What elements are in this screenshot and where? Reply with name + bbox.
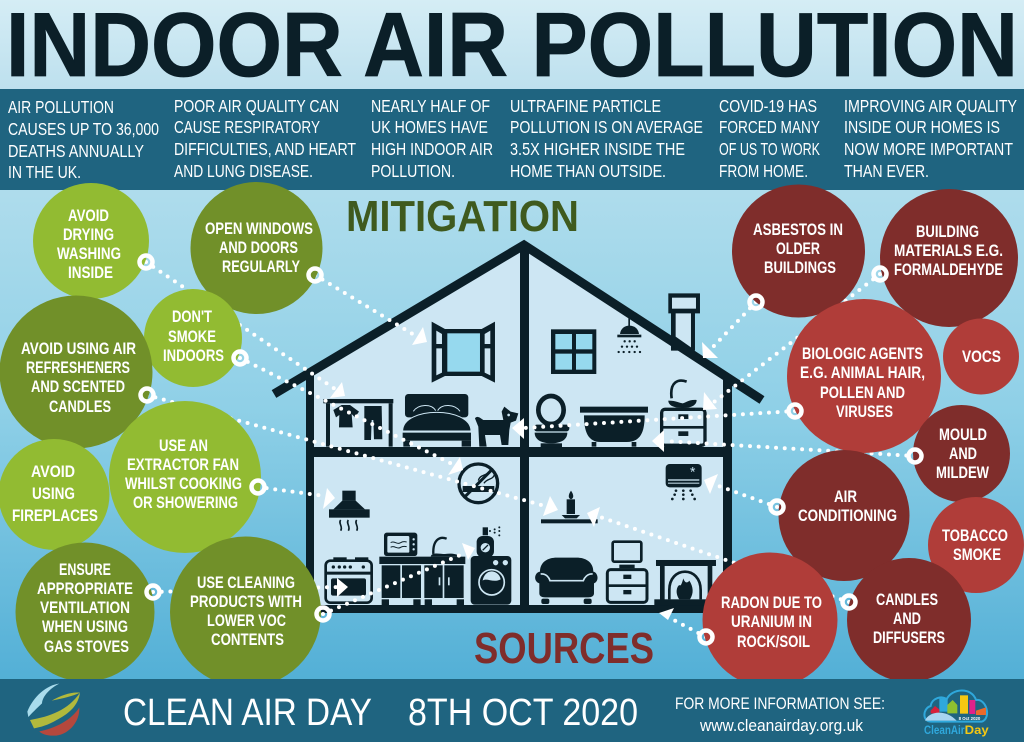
arrow: no smoking	[240, 358, 463, 475]
footer: date: 8TH OCT 2020	[408, 692, 638, 734]
fact: health	[174, 96, 356, 181]
icon: clean air day logo	[924, 691, 989, 737]
footer: event name: CLEAN AIR DAY	[123, 692, 372, 734]
arrow: open windows to window	[315, 275, 427, 345]
fact: importance: THAN EVER.	[844, 161, 929, 181]
heading: sources: SOURCES	[474, 624, 654, 673]
icon: chimney	[668, 293, 700, 351]
circle: extractor fan: WHILST COOKING	[125, 475, 242, 493]
circle: vocs	[943, 318, 1019, 394]
icon: bed	[403, 394, 471, 447]
panel: facts band	[0, 89, 1024, 190]
icon: cooker hood	[329, 491, 370, 531]
roof	[274, 245, 762, 400]
arrow: cleaning products to spray	[323, 543, 475, 614]
circle: mould and mildew: MOULD	[939, 426, 987, 444]
icon: toilet	[534, 396, 569, 447]
circle: air conditioning: AIR	[834, 488, 857, 506]
fact: deaths	[8, 97, 159, 182]
arrow: air refresheners to candle	[147, 395, 558, 516]
circle: biologic agents	[787, 299, 941, 453]
circle: building materials: BUILDING	[916, 223, 979, 241]
circle: air refresheners: REFRESHENERS	[26, 359, 130, 377]
circle: building materials	[874, 189, 1018, 327]
arrow: drying washing to clothes rail	[146, 262, 345, 398]
fact: covid	[719, 96, 820, 181]
circle: open windows: OPEN WINDOWS	[205, 220, 313, 238]
circle: air refresheners	[0, 296, 154, 448]
circle: candles and diffusers	[842, 558, 971, 682]
icon: microwave	[384, 533, 417, 556]
circle: avoid drying washing: AVOID	[68, 207, 109, 225]
circle: air refresheners: CANDLES	[49, 398, 111, 416]
circle: asbestos: BUILDINGS	[764, 259, 836, 277]
icon: shower	[617, 318, 641, 353]
circle: mould and mildew: AND	[949, 445, 977, 463]
circle: air conditioning: CONDITIONING	[798, 507, 897, 525]
circle: don't smoke: SMOKE	[168, 328, 216, 346]
circle: radon: RADON DUE TO	[721, 594, 822, 612]
icon: bowl logo	[27, 684, 80, 736]
circle: radon: URANIUM IN	[731, 613, 812, 631]
circle: cleaning products	[170, 536, 330, 688]
icon: bathroom sink cabinet	[662, 381, 705, 445]
fact: importance	[844, 96, 1017, 181]
fact: homes	[371, 96, 493, 181]
circle: open windows	[190, 182, 322, 314]
fact: ultrafine particles: POLLUTION IS ON AVERAGE	[510, 117, 703, 137]
arrow: candles to candle	[587, 507, 849, 602]
circle: extractor fan: OR SHOWERING	[133, 494, 238, 512]
circle: ensure ventilation: VENTILATION	[40, 599, 130, 617]
circle: open windows: AND DOORS	[219, 239, 298, 257]
circle: cleaning products: PRODUCTS WITH	[190, 593, 302, 611]
footer: website: www.cleanairday.org.uk	[699, 716, 863, 735]
circle: avoid drying washing	[33, 183, 152, 299]
icon: tv on drawers	[607, 542, 647, 602]
footer: more information: FOR MORE INFORMATION SEE:	[675, 694, 885, 713]
circle: asbestos: OLDER	[776, 240, 820, 258]
circle: avoid drying washing: WASHING	[57, 245, 121, 263]
fact: deaths: AIR POLLUTION	[8, 97, 114, 117]
fact: deaths: DEATHS ANNUALLY	[8, 141, 144, 161]
arrow: biologic agents to toilet	[512, 411, 795, 439]
icon: no smoking	[459, 464, 498, 503]
circle: ensure ventilation: WHEN USING	[42, 618, 128, 636]
circle: ensure ventilation	[16, 542, 160, 682]
fact: deaths: IN THE UK.	[8, 162, 81, 182]
fact: covid: OF US TO WORK	[719, 139, 820, 159]
panel: footer	[0, 679, 1024, 742]
arrow: mould to cabinet	[652, 430, 915, 456]
circle: air conditioning	[770, 450, 910, 581]
circle: asbestos: ASBESTOS IN	[753, 221, 843, 239]
circle: extractor fan: EXTRACTOR FAN	[127, 456, 239, 474]
circle: candles and diffusers: CANDLES	[876, 591, 938, 609]
circle: radon	[700, 552, 838, 688]
fact: covid: FORCED MANY	[719, 117, 820, 137]
fact: homes: UK HOMES HAVE	[371, 117, 488, 137]
circle: asbestos	[732, 184, 865, 318]
circle: avoid using fireplaces: USING	[32, 485, 75, 503]
circle: building materials: MATERIALS E.G.	[894, 242, 1003, 260]
circle: extractor fan	[109, 401, 264, 553]
icon: dog	[475, 407, 518, 447]
circle: ensure ventilation: APPROPRIATE	[37, 580, 133, 598]
icon: kitchen units	[379, 538, 465, 605]
icon: clean air day logo: 8 Oct 2020	[959, 716, 981, 721]
icon: candle on shelf	[541, 491, 598, 523]
icon: air conditioner	[666, 464, 702, 500]
circle: vocs: VOCS	[962, 348, 1001, 366]
circle: tobacco smoke: SMOKE	[953, 546, 1001, 564]
circle: candles and diffusers: DIFFUSERS	[873, 629, 945, 647]
circle: air refresheners: AND SCENTED	[31, 378, 125, 396]
circle: avoid drying washing: INSIDE	[68, 264, 113, 282]
circle: radon: ROCK/SOIL	[737, 633, 810, 651]
fact: ultrafine particles	[510, 96, 703, 181]
circle: avoid using fireplaces: AVOID	[31, 463, 75, 481]
fact: covid: COVID-19 HAS	[719, 96, 817, 116]
arrow: ventilation to oven	[153, 578, 348, 597]
fact: health: CAUSE RESPIRATORY	[174, 117, 320, 137]
arrow: building materials	[703, 274, 880, 410]
circle: air refresheners: AVOID USING AIR	[21, 340, 136, 358]
circle: don't smoke: DON'T	[172, 308, 212, 326]
circle: avoid using fireplaces	[0, 439, 110, 550]
circle: biologic agents: POLLEN AND	[820, 384, 905, 402]
circle: cleaning products: CONTENTS	[211, 631, 284, 649]
fact: health: AND LUNG DISEASE.	[174, 161, 313, 181]
icon: air conditioner: *	[690, 464, 696, 480]
fact: homes: POLLUTION.	[371, 161, 455, 181]
arrow: radon	[659, 608, 706, 637]
circle: mould and mildew	[908, 405, 1010, 502]
icon: washing machine and spray	[471, 526, 511, 605]
circle: avoid drying washing: DRYING	[63, 226, 114, 244]
icon: bathroom window	[551, 329, 596, 374]
circle: mould and mildew: MILDEW	[936, 464, 990, 482]
circle: avoid using fireplaces: FIREPLACES	[12, 507, 98, 525]
house	[274, 245, 762, 613]
icon: sofa	[535, 558, 598, 604]
circle: cleaning products: LOWER VOC	[207, 612, 286, 630]
icon: open window	[432, 322, 495, 383]
circle: candles and diffusers: AND	[893, 610, 921, 628]
icon: oven	[326, 557, 372, 603]
circle: ensure ventilation: GAS STOVES	[44, 638, 129, 656]
circle: don't smoke	[144, 289, 246, 387]
fact: ultrafine particles: HOME THAN OUTSIDE.	[510, 161, 666, 181]
fact: ultrafine particles: ULTRAFINE PARTICLE	[510, 96, 661, 116]
arrow: extractor fan to hood	[258, 487, 335, 509]
circle: don't smoke: INDOORS	[163, 347, 224, 365]
icon: clothes rail	[323, 399, 393, 447]
fact: covid: FROM HOME.	[719, 161, 808, 181]
circle: tobacco smoke: TOBACCO	[942, 527, 1008, 545]
icon: bath	[580, 407, 648, 447]
icon: clean air day logo: CleanAir	[924, 723, 965, 737]
circle: biologic agents: BIOLOGIC AGENTS	[802, 345, 923, 363]
icon: fireplace	[654, 560, 718, 606]
icon: clean air day logo: Day	[965, 723, 989, 737]
fact: ultrafine particles: 3.5X HIGHER INSIDE THE	[510, 139, 685, 159]
arrow: air conditioning	[704, 474, 777, 507]
heading: mitigation: MITIGATION	[346, 192, 579, 241]
fact: homes: HIGH INDOOR AIR	[371, 139, 493, 159]
arrow: asbestos to roof	[702, 302, 756, 358]
fact: homes: NEARLY HALF OF	[371, 96, 490, 116]
fact: health: DIFFICULTIES, AND HEART	[174, 139, 356, 159]
circle: extractor fan: USE AN	[159, 437, 208, 455]
fact: health: POOR AIR QUALITY CAN	[174, 96, 339, 116]
circle: cleaning products: USE CLEANING	[197, 574, 295, 592]
circle: open windows: REGULARLY	[222, 258, 300, 276]
fact: deaths: CAUSES UP TO 36,000	[8, 119, 159, 139]
circle: ensure ventilation: ENSURE	[59, 561, 111, 579]
circle: biologic agents: VIRUSES	[836, 403, 893, 421]
circle: biologic agents: E.G. ANIMAL HAIR,	[800, 364, 925, 382]
circle: tobacco smoke	[928, 497, 1024, 593]
